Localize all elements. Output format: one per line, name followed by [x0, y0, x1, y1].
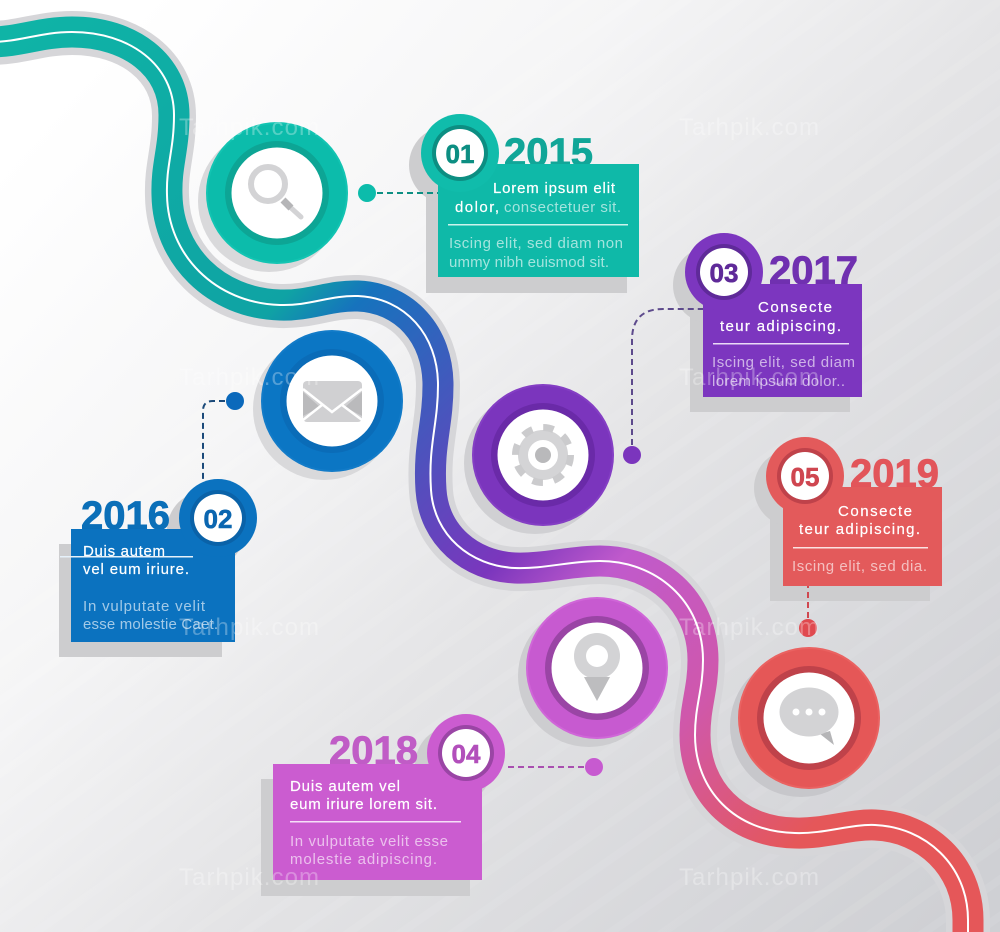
panel: 2018: eum iriure lorem sit.	[290, 796, 437, 813]
circle: search 2015	[198, 122, 348, 272]
connector: 2019	[799, 586, 817, 637]
badge 01: 01	[446, 139, 474, 169]
panel: 2019: Consecte	[838, 503, 912, 520]
panel: 2015	[409, 114, 639, 293]
year 2019: 2019	[850, 452, 939, 496]
panel: 2018	[261, 714, 505, 896]
watermarks: Tarhpik.com	[179, 114, 319, 141]
panel: 2016: Duis autem	[83, 543, 165, 560]
panel: 2018: In vulputate velit esse	[290, 833, 448, 850]
panel: 2017	[673, 233, 862, 412]
panel: 2019: teur adipiscing.	[799, 521, 920, 538]
connector: 2017	[623, 309, 703, 464]
year 2018: 2018	[329, 729, 418, 773]
panel: 2015: ummy nibh euismod sit.	[449, 254, 609, 271]
watermarks: Tarhpik.com	[679, 364, 819, 391]
connector: 2016	[203, 392, 244, 482]
badge 04: 04	[452, 739, 481, 769]
badge 04	[427, 714, 505, 792]
badge 05: 05	[791, 462, 819, 492]
connector: 2018	[505, 758, 603, 776]
year 2017: 2017	[769, 249, 858, 293]
panel: 2016: vel eum iriure.	[83, 561, 189, 578]
icon: gear	[516, 428, 570, 482]
panel: 2017: lorem ipsum dolor..	[712, 373, 845, 390]
watermarks: Tarhpik.com	[179, 364, 319, 391]
watermarks: Tarhpik.com	[679, 614, 819, 641]
icon: speech bubble	[780, 688, 838, 745]
badge 02: 02	[204, 504, 232, 534]
panel: 2016: esse molestie Caet.	[83, 616, 218, 633]
connector: 2015	[358, 184, 438, 202]
panel: 2017: Consecte	[758, 299, 832, 316]
panel: 2016: In vulputate velit	[83, 598, 206, 615]
panel: 2015: Lorem ipsum elit	[493, 180, 616, 197]
icon: envelope	[303, 381, 362, 422]
panel: 2018: Duis autem vel	[290, 778, 400, 795]
circle: map pin 2018	[518, 597, 668, 747]
panel: 2019: Iscing elit, sed dia.	[792, 558, 927, 575]
watermarks: Tarhpik.com	[679, 114, 819, 141]
icon: magnifying glass	[251, 167, 301, 217]
badge 05	[766, 437, 844, 515]
badge 03: 03	[710, 258, 738, 288]
watermarks: Tarhpik.com	[179, 614, 319, 641]
watermarks: Tarhpik.com	[179, 864, 319, 891]
panel: 2017: teur adipiscing.	[720, 318, 841, 335]
panel: 2018: molestie adipiscing.	[290, 851, 437, 868]
watermarks: Tarhpik.com	[679, 864, 819, 891]
panel: 2015: dolor,	[455, 199, 499, 216]
circle: gear 2017	[464, 384, 614, 534]
badge 03	[685, 233, 763, 311]
badge 01	[421, 114, 499, 192]
circle: chat 2019	[730, 647, 880, 797]
badge 02	[179, 479, 257, 557]
panel: 2015: consectetuer sit.	[504, 199, 621, 216]
panel: 2015: Iscing elit, sed diam non	[449, 235, 623, 252]
panel: 2016	[59, 479, 257, 657]
panel: 2017: Iscing elit, sed diam	[712, 354, 855, 371]
icon: map pin	[574, 633, 620, 701]
panel: 2019	[754, 437, 942, 601]
watermarks	[179, 114, 819, 891]
circle: envelope 2016	[253, 330, 403, 480]
year 2015: 2015	[504, 131, 593, 175]
year 2016: 2016	[81, 494, 170, 538]
